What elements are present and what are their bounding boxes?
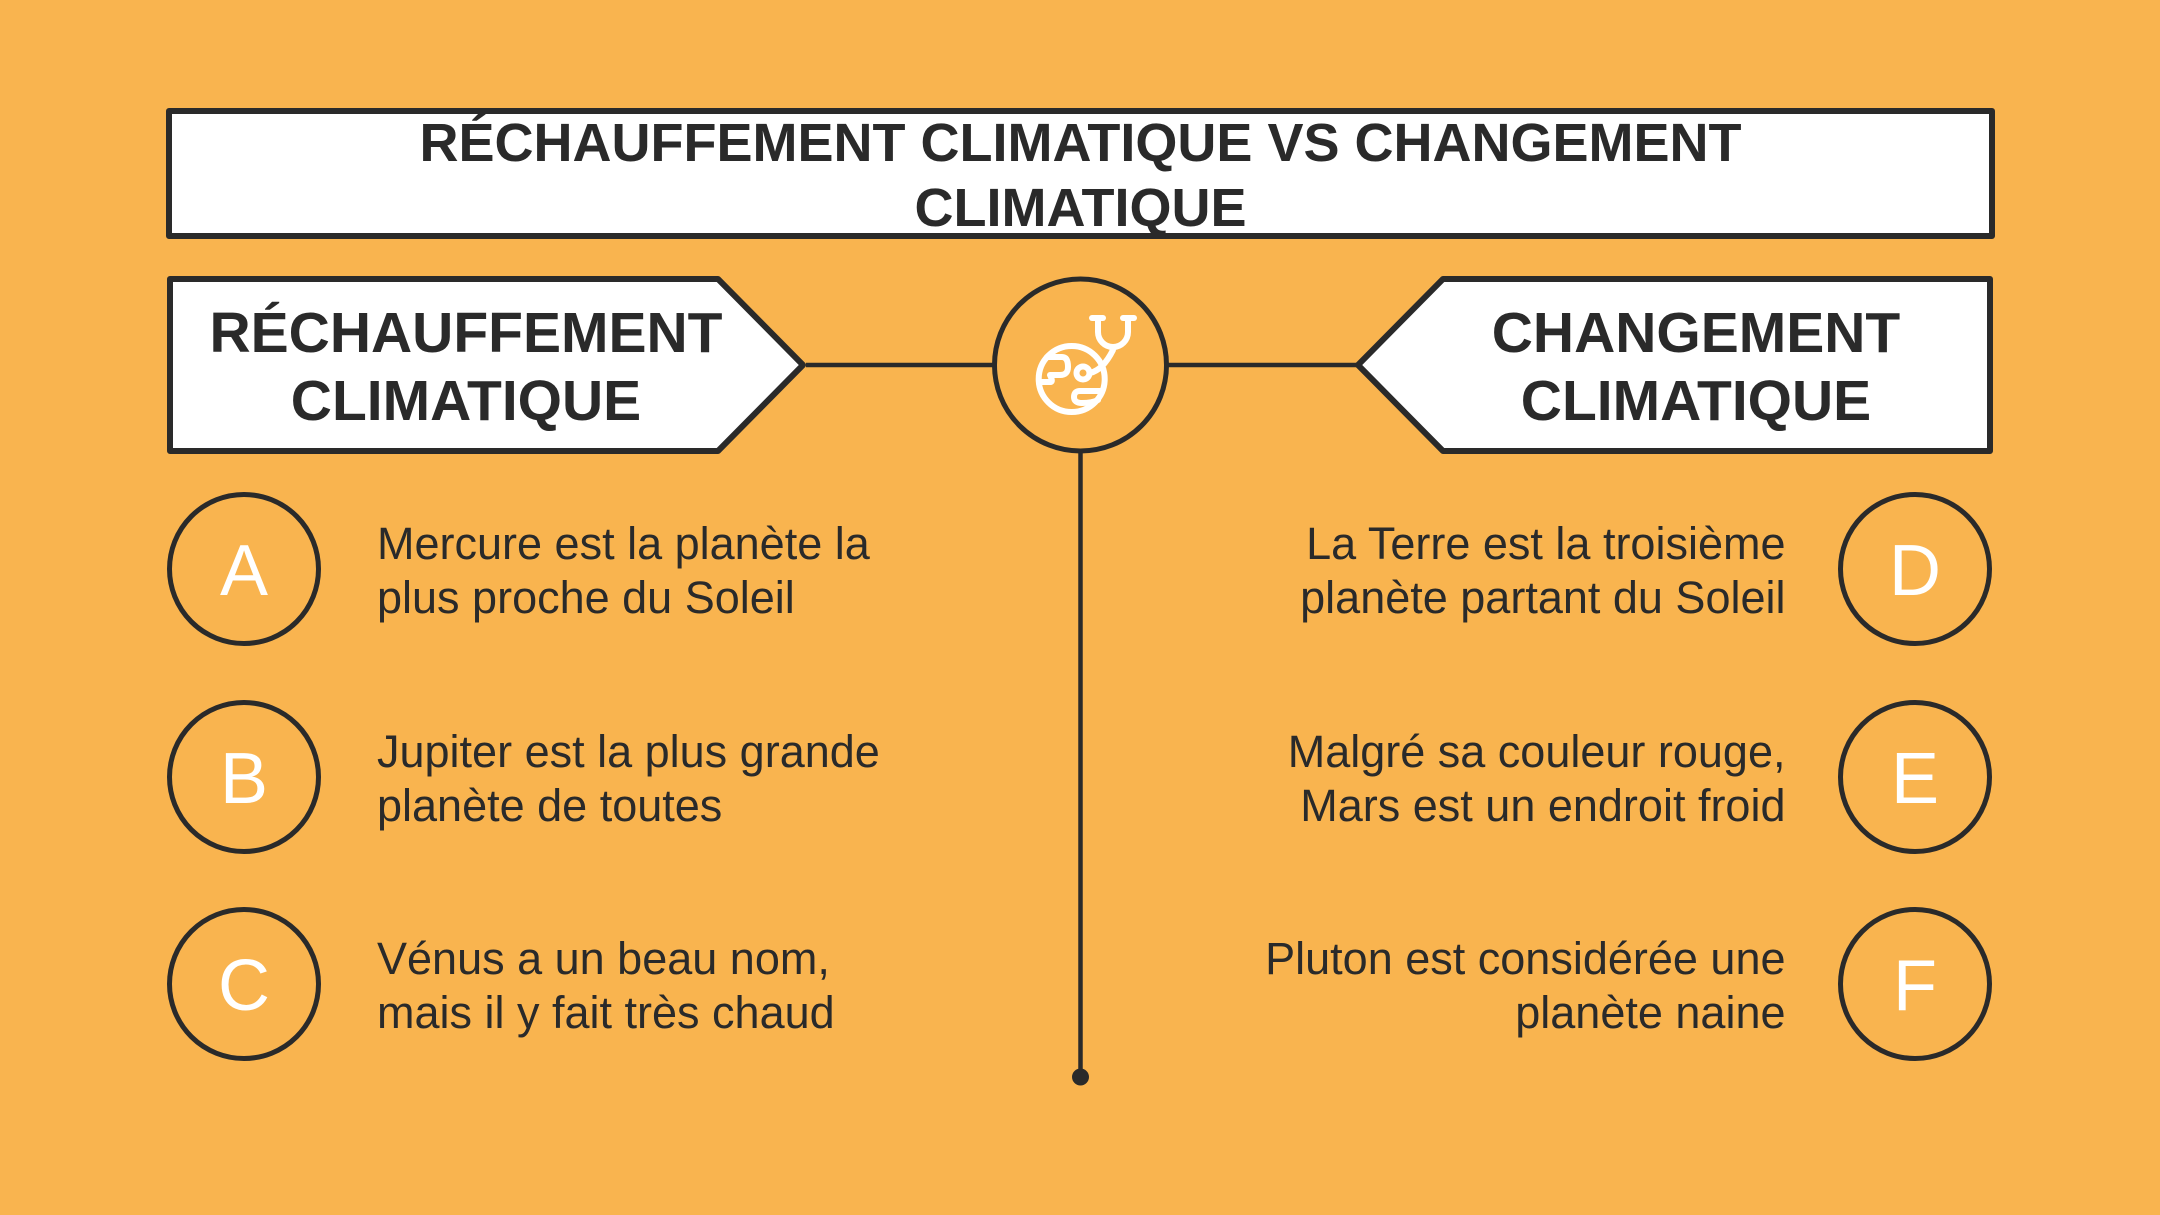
item E: Mars est un endroit froid [1300, 780, 1786, 831]
item E: E [1891, 739, 1939, 819]
item F [1265, 910, 1990, 1058]
item E: Malgré sa couleur rouge, [1288, 726, 1786, 777]
item D: La Terre est la troisième [1306, 518, 1786, 569]
timeline with end dot [1072, 453, 1089, 1086]
item B [170, 702, 880, 852]
item B: planète de toutes [377, 780, 722, 831]
left heading banner: CLIMATIQUE [291, 369, 641, 433]
item C [170, 910, 835, 1058]
item C: Vénus a un beau nom, [377, 933, 830, 984]
title: RÉCHAUFFEMENT CLIMATIQUE VS CHANGEMENT [420, 113, 1741, 173]
item B: B [220, 739, 268, 819]
center circle with globe and stethoscope icon [994, 279, 1166, 451]
item F: planète naine [1515, 987, 1786, 1038]
right heading banner: CLIMATIQUE [1521, 369, 1871, 433]
item F: Pluton est considérée une [1265, 933, 1786, 984]
item A: plus proche du Soleil [377, 572, 795, 623]
item A: A [220, 531, 268, 611]
title [169, 111, 1992, 238]
item D [1300, 494, 1990, 644]
right heading banner: CHANGEMENT [1492, 301, 1900, 365]
title: CLIMATIQUE [915, 178, 1246, 238]
item A [170, 494, 871, 644]
item C: C [218, 946, 270, 1026]
item D: D [1889, 531, 1941, 611]
right heading banner [1358, 279, 1990, 451]
left heading banner [170, 279, 803, 451]
item E [1288, 702, 1990, 852]
item D: planète partant du Soleil [1300, 572, 1786, 623]
item F: F [1893, 946, 1937, 1026]
icon: globe with stethoscope [1039, 318, 1134, 412]
item B: Jupiter est la plus grande [377, 726, 880, 777]
connector lines [806, 363, 1358, 367]
left heading banner: RÉCHAUFFEMENT [210, 301, 723, 365]
item C: mais il y fait très chaud [377, 987, 835, 1038]
item A: Mercure est la planète la [377, 518, 871, 569]
